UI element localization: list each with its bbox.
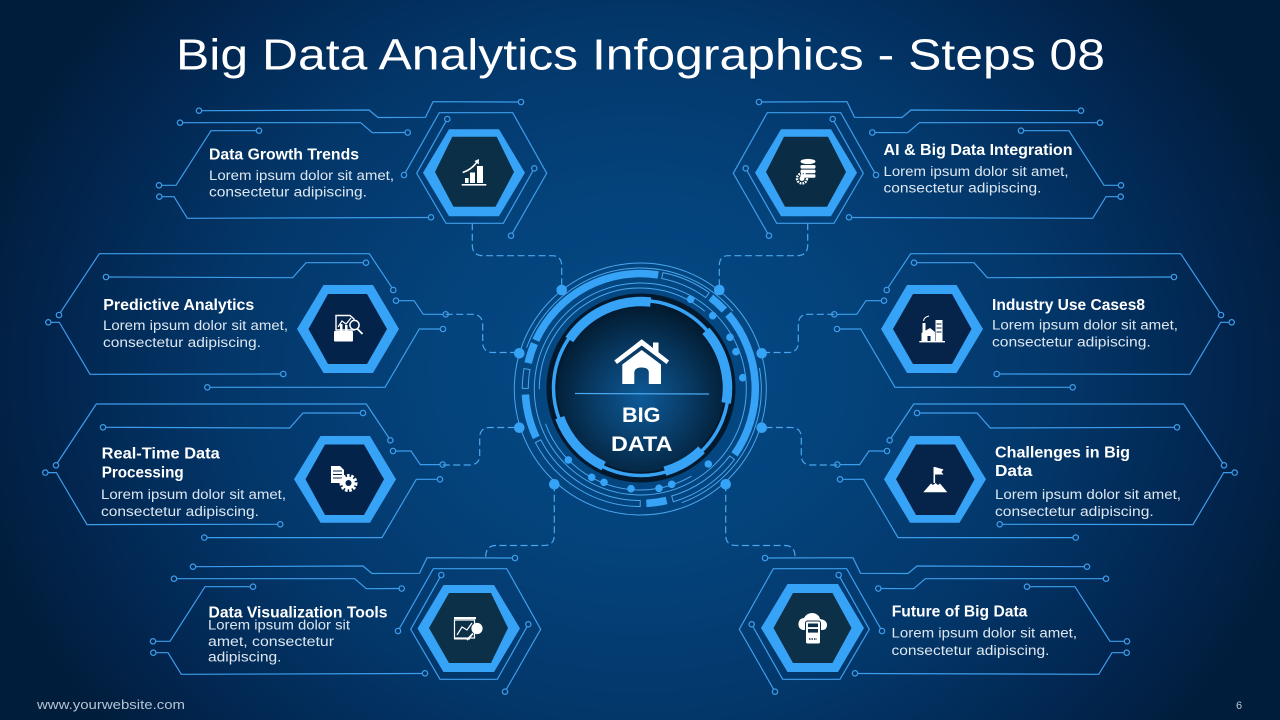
heading: Future of Big Data (892, 604, 1027, 621)
panel: Predictive Analytics (46, 254, 448, 390)
circuit frame (150, 555, 541, 694)
body text: Lorem ipsum dolor sit amet, (209, 168, 394, 183)
hexagon (761, 584, 864, 672)
heading: Data Visualization Tools (208, 604, 388, 621)
inner blue arc ring (519, 266, 763, 510)
circuit frame (733, 99, 1124, 238)
body text: Lorem ipsum dolor sit amet, (892, 626, 1077, 641)
heading: AI & Big Data Integration (884, 142, 1072, 159)
heading: Predictive Analytics (103, 297, 254, 314)
hexagon (884, 436, 986, 523)
body text: consectetur adipiscing. (103, 335, 261, 350)
panel: Challenges in Big Data (835, 404, 1237, 540)
heading: Challenges in Big (995, 444, 1130, 461)
hexagon (881, 285, 983, 373)
hub label: DATA (611, 433, 672, 456)
panel: AI & Big Data Integration (733, 99, 1124, 238)
icon: document and gear (331, 466, 356, 490)
hexagon (423, 129, 525, 216)
segmented arc ring (478, 226, 802, 551)
icon: growth chart (462, 159, 486, 186)
body text: consectetur adipiscing. (995, 504, 1154, 519)
body text: Lorem ipsum dolor sit amet, (884, 164, 1068, 179)
outer tech rings (485, 234, 795, 544)
circuit frame (739, 555, 1130, 694)
icon: factory (919, 316, 945, 342)
heading: Data (995, 463, 1032, 480)
body text: Lorem ipsum dolor sit (208, 617, 350, 632)
heading: Processing (102, 464, 184, 481)
circuit frame (835, 404, 1237, 540)
body text: Lorem ipsum dolor sit amet, (101, 487, 286, 502)
icon: mountain flag (923, 467, 947, 492)
hub label: BIG (622, 404, 660, 427)
panel: Real-Time Data Processing (43, 404, 445, 540)
dashed connectors (443, 223, 837, 557)
panel: Future of Big Data (739, 555, 1130, 694)
title: Big Data Analytics Infographics - Steps 08 (176, 30, 1105, 80)
body text: Lorem ipsum dolor sit amet, (995, 487, 1181, 502)
circuit frame (43, 404, 445, 540)
body text (992, 317, 1178, 349)
body text: Lorem ipsum dolor sit amet, (103, 318, 288, 333)
body text (209, 168, 394, 200)
connector nodes (514, 285, 767, 490)
body text (208, 617, 350, 665)
body text (995, 487, 1181, 519)
body text: Lorem ipsum dolor sit amet, (992, 317, 1178, 332)
heading: Data Growth Trends (209, 146, 359, 163)
hexagon (755, 129, 857, 216)
body text: consectetur adipiscing. (892, 643, 1050, 658)
body text (101, 487, 286, 519)
hub label (611, 404, 672, 456)
body text (892, 626, 1077, 658)
body text (884, 164, 1068, 196)
circuit frame (832, 254, 1234, 390)
hexagon (418, 585, 520, 672)
circuit frame (156, 99, 547, 238)
body text: consectetur adipiscing. (209, 185, 367, 200)
circuit frame (46, 254, 448, 390)
dark disc (546, 294, 736, 482)
body text: consectetur adipiscing. (992, 334, 1151, 349)
hexagon (294, 436, 396, 523)
small ring dots (564, 296, 746, 493)
panel: Data Growth Trends (156, 99, 547, 238)
icon: presentation with magnifier (454, 617, 483, 640)
heading (995, 444, 1130, 480)
divider (575, 392, 709, 395)
heading (102, 445, 220, 481)
central hub (478, 226, 802, 551)
icon: database and gear (797, 159, 816, 184)
icon: cloud server (798, 613, 827, 644)
body text: consectetur adipiscing. (101, 504, 259, 519)
body text: amet, consectetur (208, 634, 335, 649)
heading: Real-Time Data (102, 445, 220, 462)
panel: Data Visualization Tools (150, 555, 541, 694)
body text: consectetur adipiscing. (884, 181, 1042, 196)
panel: Industry Use Cases (832, 254, 1234, 390)
icon: predictive analysis (334, 316, 362, 342)
page number: 6 (1236, 700, 1242, 712)
inner gradient disc (557, 304, 725, 472)
icon: house (614, 339, 669, 384)
hexagon (297, 285, 399, 373)
heading: Industry Use Cases8 (992, 297, 1145, 314)
footer website: www.yourwebsite.com (36, 697, 185, 712)
body text (103, 318, 288, 350)
body text: adipiscing. (208, 650, 282, 665)
